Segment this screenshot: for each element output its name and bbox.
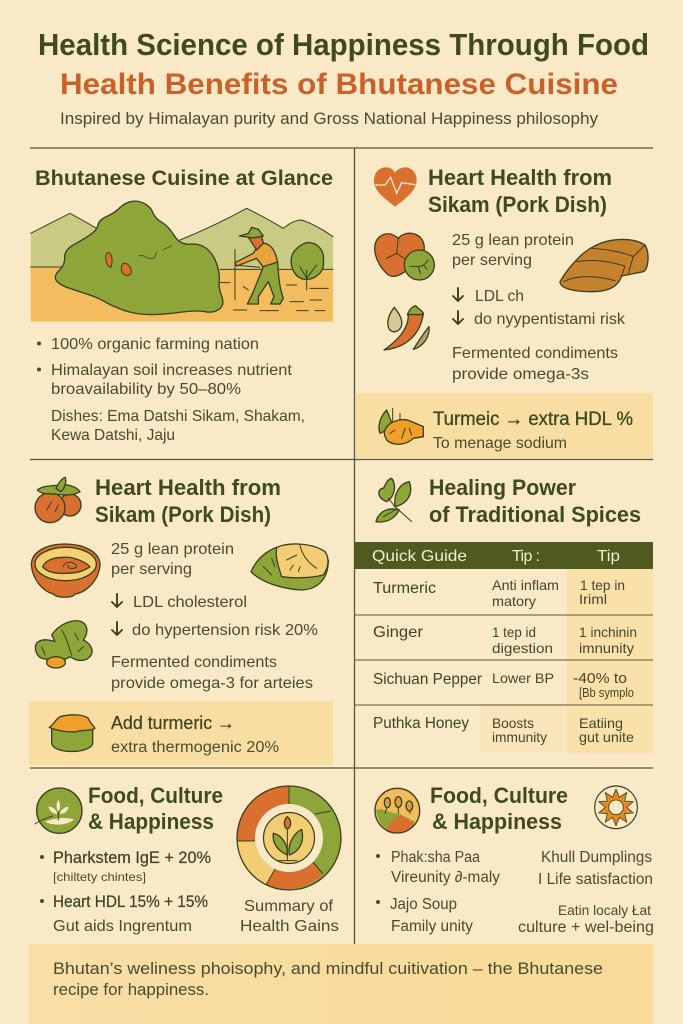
heading: healing power: of Traditional Spices [429, 502, 641, 527]
table row: sichuan pepper: Sichuan Pepper [373, 671, 482, 688]
table row: turmeric [373, 577, 625, 609]
panel: Food, Culture and Happiness right [375, 783, 654, 936]
table row: puthka honey: Puthka Honey [373, 715, 469, 732]
chart caption [240, 898, 339, 935]
text: protein and cholesterol facts [111, 541, 318, 692]
bullet list: dishes: Vireunity ∂-maly [391, 869, 500, 886]
callout: add turmeric: Add turmeric → [111, 713, 235, 733]
bullet list: organic farming facts: Himalayan soil increases nutrient [51, 362, 293, 379]
table row: puthka honey: Eatiing [579, 715, 623, 731]
table header row [354, 542, 653, 569]
icon: pork slab [560, 239, 648, 292]
table row: turmeric: 1 tep in [580, 577, 625, 593]
table row: puthka honey: immunity [492, 729, 547, 745]
table row: turmeric: Iriml [579, 591, 607, 607]
bullet list: dishes [376, 849, 500, 935]
bullet list: dishes: Phak:sha Paa [391, 849, 480, 866]
heading: food culture happiness: Food, Culture [88, 783, 223, 808]
heading: healing power [429, 475, 641, 527]
text: protein and cholesterol facts: do hypertension risk 20% [132, 622, 318, 639]
icon: chili and seed [384, 306, 429, 350]
heading: heart health: Heart Health from [95, 475, 281, 500]
heading: heart health: Heart Health from [428, 165, 612, 190]
text: protein and cholesterol facts: Fermented condiments [111, 654, 277, 671]
footer banner [29, 944, 653, 1024]
table row: puthka honey [373, 715, 634, 745]
panel: Food, Culture and Happiness left [35, 783, 341, 935]
chart caption: Summary of [244, 898, 334, 915]
text: protein and cholesterol facts: LDL ch [475, 288, 524, 305]
table row: ginger: imnunity [579, 640, 634, 656]
text: protein and cholesterol facts: per serving [111, 561, 192, 578]
text: dumplings and life satisfaction [518, 849, 654, 936]
text: protein and cholesterol facts: per serving [452, 252, 532, 269]
text: protein and cholesterol facts: Fermented condiments [452, 345, 618, 362]
text: protein and cholesterol facts: provide omega-3 for arteies [111, 675, 313, 692]
text: protein and cholesterol facts: 25 g lean protein [111, 541, 234, 558]
text: dumplings and life satisfaction: Khull Dumplings [541, 849, 652, 866]
text: dumplings and life satisfaction: culture + wel-being [518, 919, 654, 936]
icon: sun badge [595, 786, 637, 829]
icon: heart-shaped meat with cabbage [375, 233, 434, 280]
text: dumplings and life satisfaction: I Life satisfaction [538, 871, 653, 888]
text: protein and cholesterol facts: provide omega-3s [452, 366, 589, 383]
table header row: Tip : [512, 548, 540, 565]
text: dumplings and life satisfaction: Eatin localy Łat [558, 902, 651, 918]
icon: community plant badge [375, 788, 420, 834]
icon: heart with pulse [374, 167, 417, 207]
footer banner: recipe for happiness. [53, 981, 209, 999]
chart: donut summary of health gains [237, 786, 341, 890]
table row: turmeric: Anti inflam [492, 577, 559, 593]
text: protein and cholesterol facts: 25 g lean protein [452, 232, 574, 249]
callout: add turmeric [29, 701, 333, 765]
icon: leaf wrapped pastry [251, 544, 328, 590]
table row: turmeric: Turmeric [373, 580, 436, 597]
bullet list: organic farming facts: Dishes: Ema Datshi Sikam, Shakam, [51, 408, 305, 425]
bullet list: health gains: Heart HDL 15% + 15% [53, 892, 208, 911]
bullet list: dishes: Jajo Soup [390, 896, 457, 913]
header [38, 27, 649, 128]
table row: turmeric: matory [492, 593, 536, 609]
table row: puthka honey: gut unite [579, 729, 634, 745]
table row: sichuan pepper: [Bb symplo [579, 686, 634, 700]
bullet list: organic farming facts: 100% organic farming nation [51, 336, 259, 353]
text: protein and cholesterol facts: do nyypentistami risk [474, 311, 626, 328]
bullet list: health gains: [chiltety chintes] [53, 870, 146, 884]
icon: persimmon fruit [35, 477, 81, 523]
table row: ginger: Ginger [373, 624, 423, 641]
panel: Heart Health middle left [29, 475, 333, 765]
table row: sichuan pepper: -40% to [573, 670, 627, 687]
bullet list: organic farming facts: Kewa Datshi, Jaju [51, 427, 175, 444]
chart caption: Health Gains [240, 918, 339, 935]
table header row: Tip [597, 548, 620, 565]
callout: add turmeric: extra thermogenic 20% [111, 739, 279, 756]
heading: healing power: Healing Power [429, 475, 576, 500]
table row: ginger [373, 624, 637, 656]
bullet list: organic farming facts: broavailability by 50–80% [51, 381, 241, 398]
bullet list: health gains: Pharkstem IgE + 20% [53, 848, 211, 867]
table row: ginger: 1 tep id [492, 624, 536, 640]
table row: puthka honey: Boosts [492, 715, 534, 731]
bullet list: dishes: Family unity [391, 918, 473, 935]
title: Health Science of Happiness Through Food [38, 27, 649, 62]
callout: turmeric tip [356, 393, 653, 458]
callout: turmeric tip: To menage sodium [433, 435, 567, 452]
panel: Bhutanese Cuisine at Glance [31, 166, 333, 444]
text: protein and cholesterol facts [452, 232, 626, 383]
heading: heart health [428, 165, 612, 217]
icon: green leafy vegetable [35, 621, 92, 668]
tagline: Inspired by Himalayan purity and Gross National Happiness philosophy [60, 110, 599, 128]
table header row: Quick Guide [372, 548, 467, 565]
bullet list: health gains [40, 848, 211, 935]
table row: sichuan pepper: Lower BP [492, 670, 554, 686]
text: protein and cholesterol facts: LDL cholesterol [133, 594, 247, 611]
heading: food culture happiness: & Happiness [88, 809, 214, 834]
panel: Healing Power of Traditional Spices [354, 475, 653, 753]
footer banner: Bhutan’s weliness phoisophy, and mindful cuitivation – the Bhutanese [53, 960, 603, 978]
icon: herb leaves [376, 478, 412, 522]
heading: cuisine at glance: Bhutanese Cuisine at Glance [35, 166, 333, 190]
heading: heart health: Sikam (Pork Dish) [95, 502, 271, 527]
callout: turmeric tip: Turmeic → extra HDL % [433, 408, 633, 430]
heading: heart health: Sikam (Pork Dish) [428, 192, 607, 217]
heading: food culture happiness [88, 783, 223, 834]
icon: bowl of curry [31, 544, 100, 597]
table row: ginger: digestion [492, 640, 553, 656]
table: quick guide [354, 542, 653, 753]
bullet list: health gains: Gut aids Ingrentum [53, 918, 192, 935]
heading: heart health [95, 475, 281, 527]
heading: food culture happiness [430, 783, 568, 834]
bullet list: organic farming facts [37, 336, 305, 444]
table row: sichuan pepper [373, 670, 634, 700]
icon: sprout badge [35, 788, 82, 833]
illustration: Bhutan map and farmer [31, 201, 333, 322]
subtitle: Health Benefits of Bhutanese Cuisine [60, 68, 618, 101]
panel: Heart Health top right [356, 165, 653, 458]
heading: food culture happiness: Food, Culture [430, 783, 568, 808]
heading: food culture happiness: & Happiness [432, 809, 562, 834]
table row: ginger: 1 inchinin [579, 624, 637, 640]
